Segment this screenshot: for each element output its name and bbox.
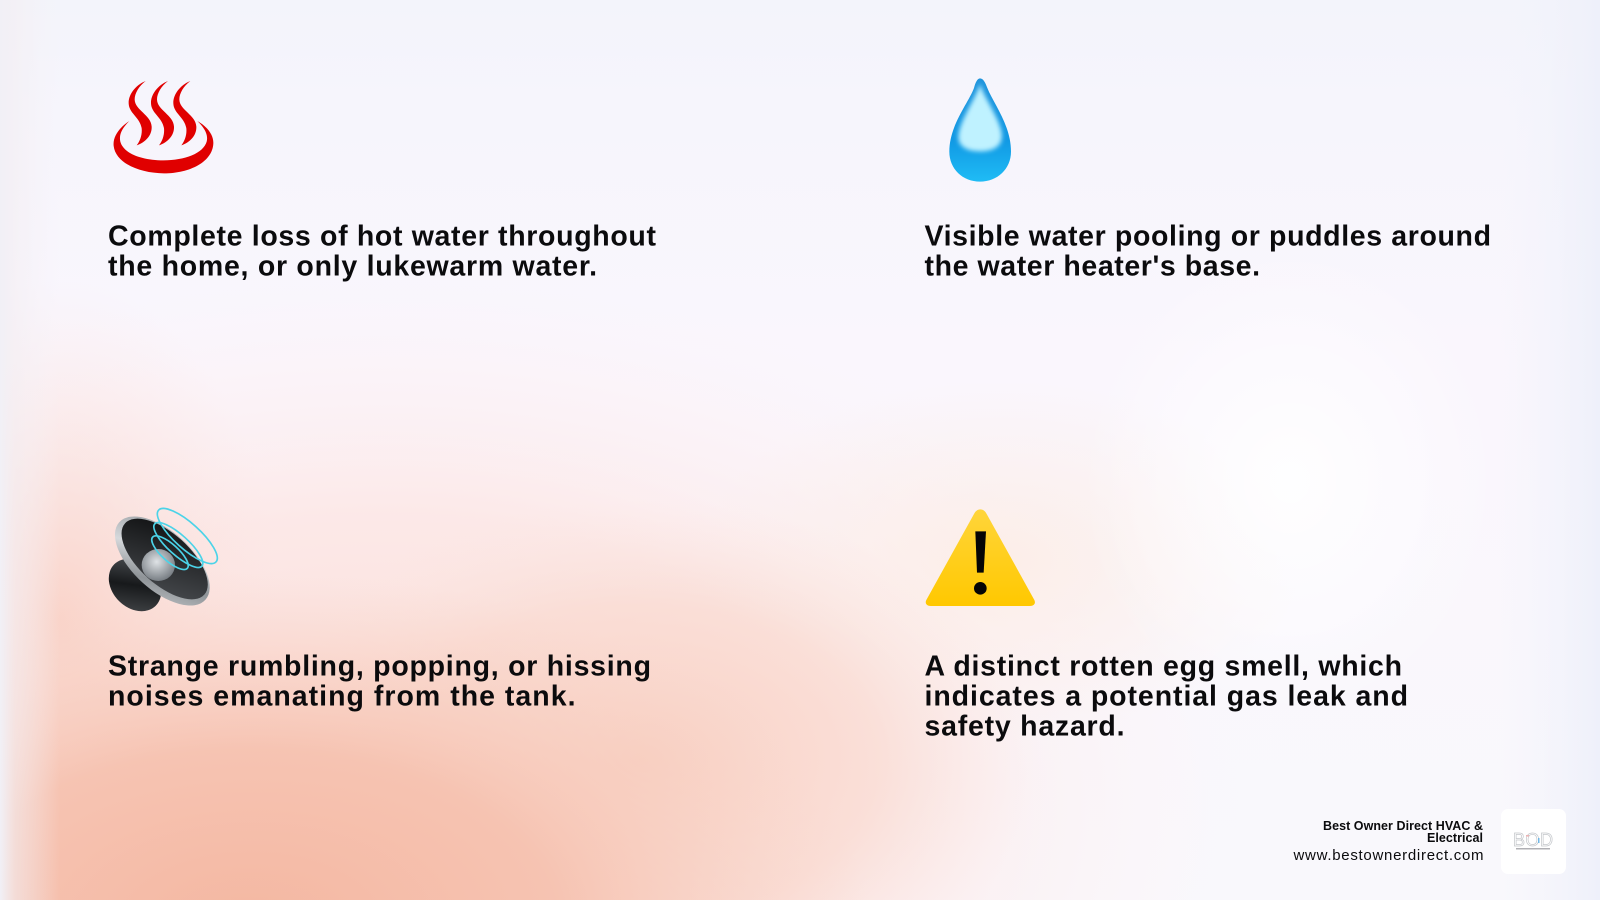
footer: company credit: www.bestownerdirect.com (1292, 847, 1484, 864)
text: rotten egg smell: A distinct rotten egg smell, which (924, 650, 1402, 682)
text: rotten egg smell: safety hazard. (924, 710, 1124, 742)
text: water pooling: Visible water pooling or puddles around (924, 220, 1491, 252)
panel: strange noises (98, 500, 651, 712)
text: strange noises (108, 650, 651, 712)
text: loss of hot water: the home, or only lukewarm water. (108, 250, 597, 282)
icon: warning triangle (926, 509, 1035, 606)
text: loss of hot water (108, 220, 656, 282)
text: water pooling (924, 220, 1491, 282)
icon: speaker (98, 500, 225, 622)
panel: rotten egg smell (924, 509, 1408, 742)
footer: company credit: Electrical (1427, 831, 1483, 845)
panel: loss of hot water (108, 81, 656, 283)
icon: hot springs (114, 81, 213, 173)
text: loss of hot water: Complete loss of hot water throughout (108, 220, 656, 252)
footer: company credit: Best Owner Direct HVAC & (1323, 819, 1483, 833)
text: water pooling: the water heater's base. (924, 250, 1260, 282)
logo card (1501, 809, 1566, 874)
logo card: BOD (1513, 830, 1553, 850)
icon: water drop (949, 78, 1011, 182)
text: rotten egg smell: indicates a potential gas leak and (924, 680, 1408, 712)
text: strange noises: noises emanating from the tank. (108, 680, 576, 712)
footer: company credit (1292, 819, 1484, 864)
text: strange noises: Strange rumbling, popping, or hissing (108, 650, 651, 682)
text: rotten egg smell (924, 650, 1408, 742)
panel: water pooling (924, 78, 1491, 282)
